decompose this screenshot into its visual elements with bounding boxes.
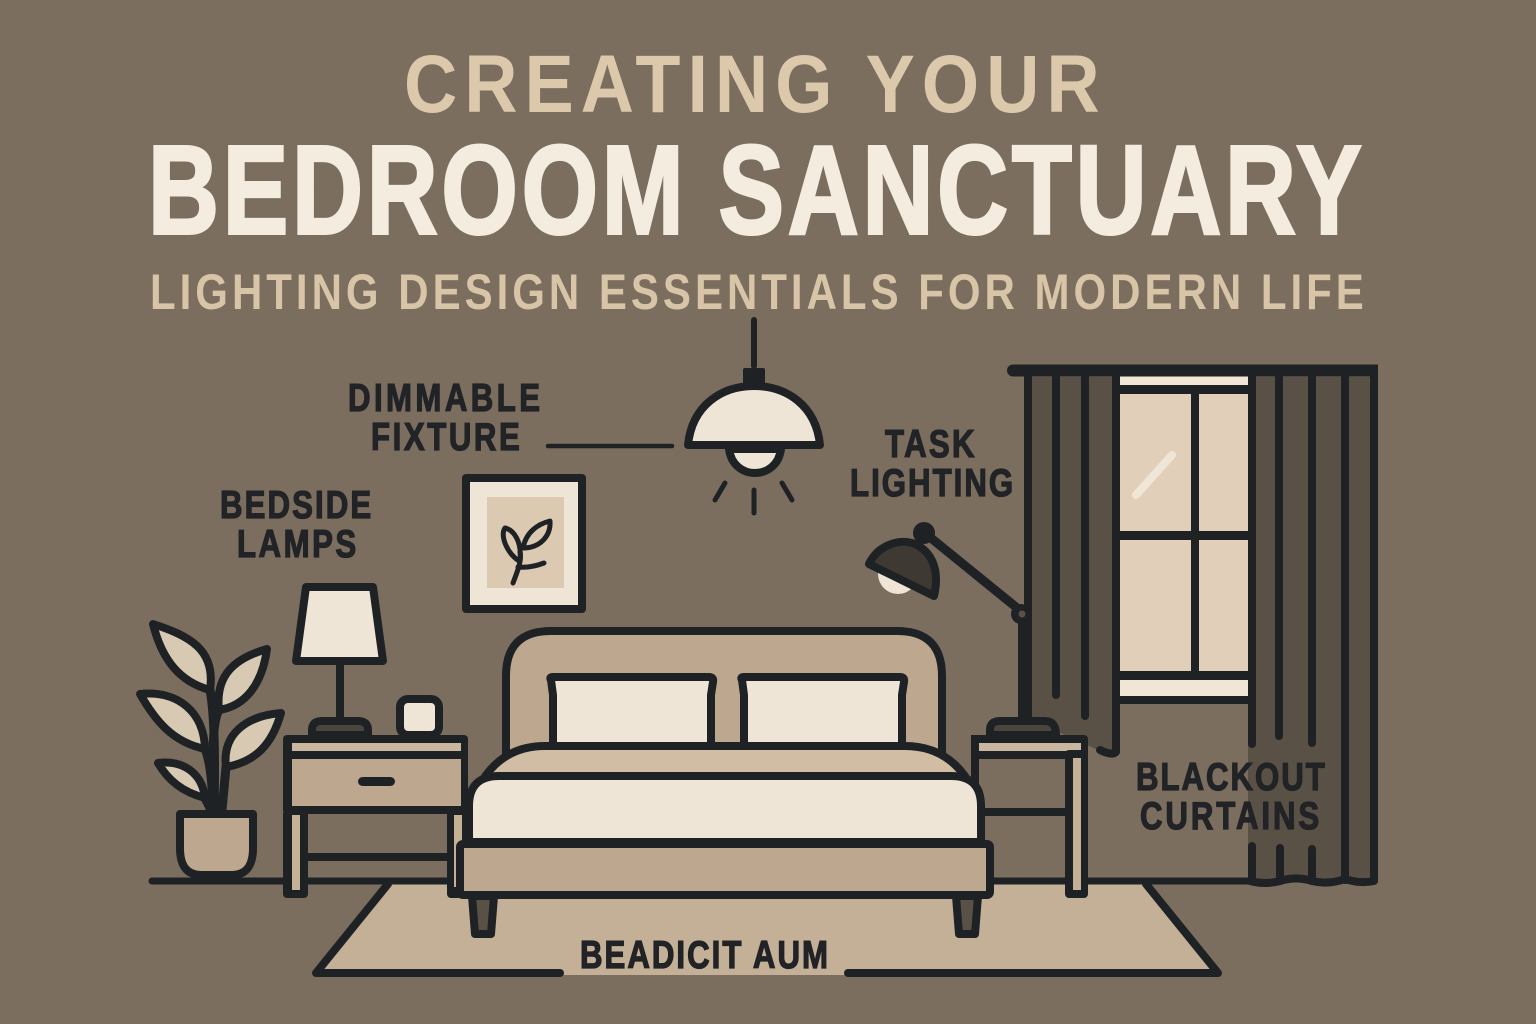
label: blackout curtains: BLACKOUT bbox=[1136, 756, 1325, 799]
label: bedside lamps: LAMPS bbox=[237, 523, 356, 566]
bedside table right bbox=[971, 721, 1088, 898]
lamp bulb bbox=[878, 554, 918, 594]
label: dimmable fixture bbox=[348, 377, 540, 459]
label: blackout curtains: CURTAINS bbox=[1140, 795, 1319, 838]
light rays bbox=[715, 483, 792, 513]
bed legs bbox=[472, 896, 978, 934]
duvet front bbox=[469, 776, 981, 842]
label: dimmable fixture: FIXTURE bbox=[371, 416, 520, 459]
window glint bbox=[1136, 455, 1172, 495]
title: bedroom sanctuary: BEDROOM SANCTUARY bbox=[148, 120, 1362, 260]
rug label: BEADICIT AUM bbox=[580, 934, 828, 977]
pot bbox=[180, 814, 253, 875]
label: bedside lamps bbox=[220, 484, 371, 566]
lamp head bbox=[869, 542, 936, 596]
leaf bbox=[158, 763, 205, 798]
title: creating your: CREATING YOUR bbox=[404, 37, 1100, 130]
leaf bbox=[140, 694, 205, 749]
pillow right bbox=[741, 677, 904, 750]
label: task lighting: LIGHTING bbox=[850, 462, 1013, 505]
bedside table left bbox=[283, 735, 468, 898]
label: bedside lamps: BEDSIDE bbox=[220, 484, 371, 527]
pendant light bbox=[688, 320, 820, 513]
floor line bbox=[152, 878, 1250, 884]
label: task lighting: TASK bbox=[885, 423, 975, 466]
leaf bbox=[153, 624, 211, 690]
subtitle: LIGHTING DESIGN ESSENTIALS FOR MODERN LIFE bbox=[150, 264, 1364, 320]
window bbox=[1116, 373, 1252, 704]
headboard bbox=[506, 631, 942, 770]
leaf bbox=[226, 713, 281, 767]
lamp stand bbox=[1018, 612, 1032, 722]
plant bbox=[140, 624, 281, 875]
pillow left bbox=[550, 677, 713, 750]
bedside lamp bbox=[296, 587, 383, 735]
leaf sketch bbox=[503, 521, 550, 583]
pendant bulb bbox=[729, 449, 781, 473]
lamp base bbox=[990, 721, 1056, 735]
leader line: dimmable fixture bbox=[548, 444, 672, 448]
drawer handle bbox=[358, 777, 395, 786]
task lamp bbox=[869, 522, 1031, 722]
curtain rod bbox=[1007, 364, 1378, 376]
curtain: left panel bbox=[1027, 377, 1116, 754]
curtain: right panel bbox=[1248, 370, 1374, 883]
label: task lighting bbox=[850, 423, 1013, 505]
cup on table bbox=[400, 699, 439, 735]
label: blackout curtains bbox=[1136, 756, 1325, 838]
label: dimmable fixture: DIMMABLE bbox=[348, 377, 540, 420]
leaf bbox=[218, 649, 267, 710]
duvet top fold bbox=[470, 746, 981, 815]
framed art bbox=[466, 478, 582, 609]
rug bbox=[316, 884, 1218, 977]
bed frame bbox=[460, 844, 990, 895]
